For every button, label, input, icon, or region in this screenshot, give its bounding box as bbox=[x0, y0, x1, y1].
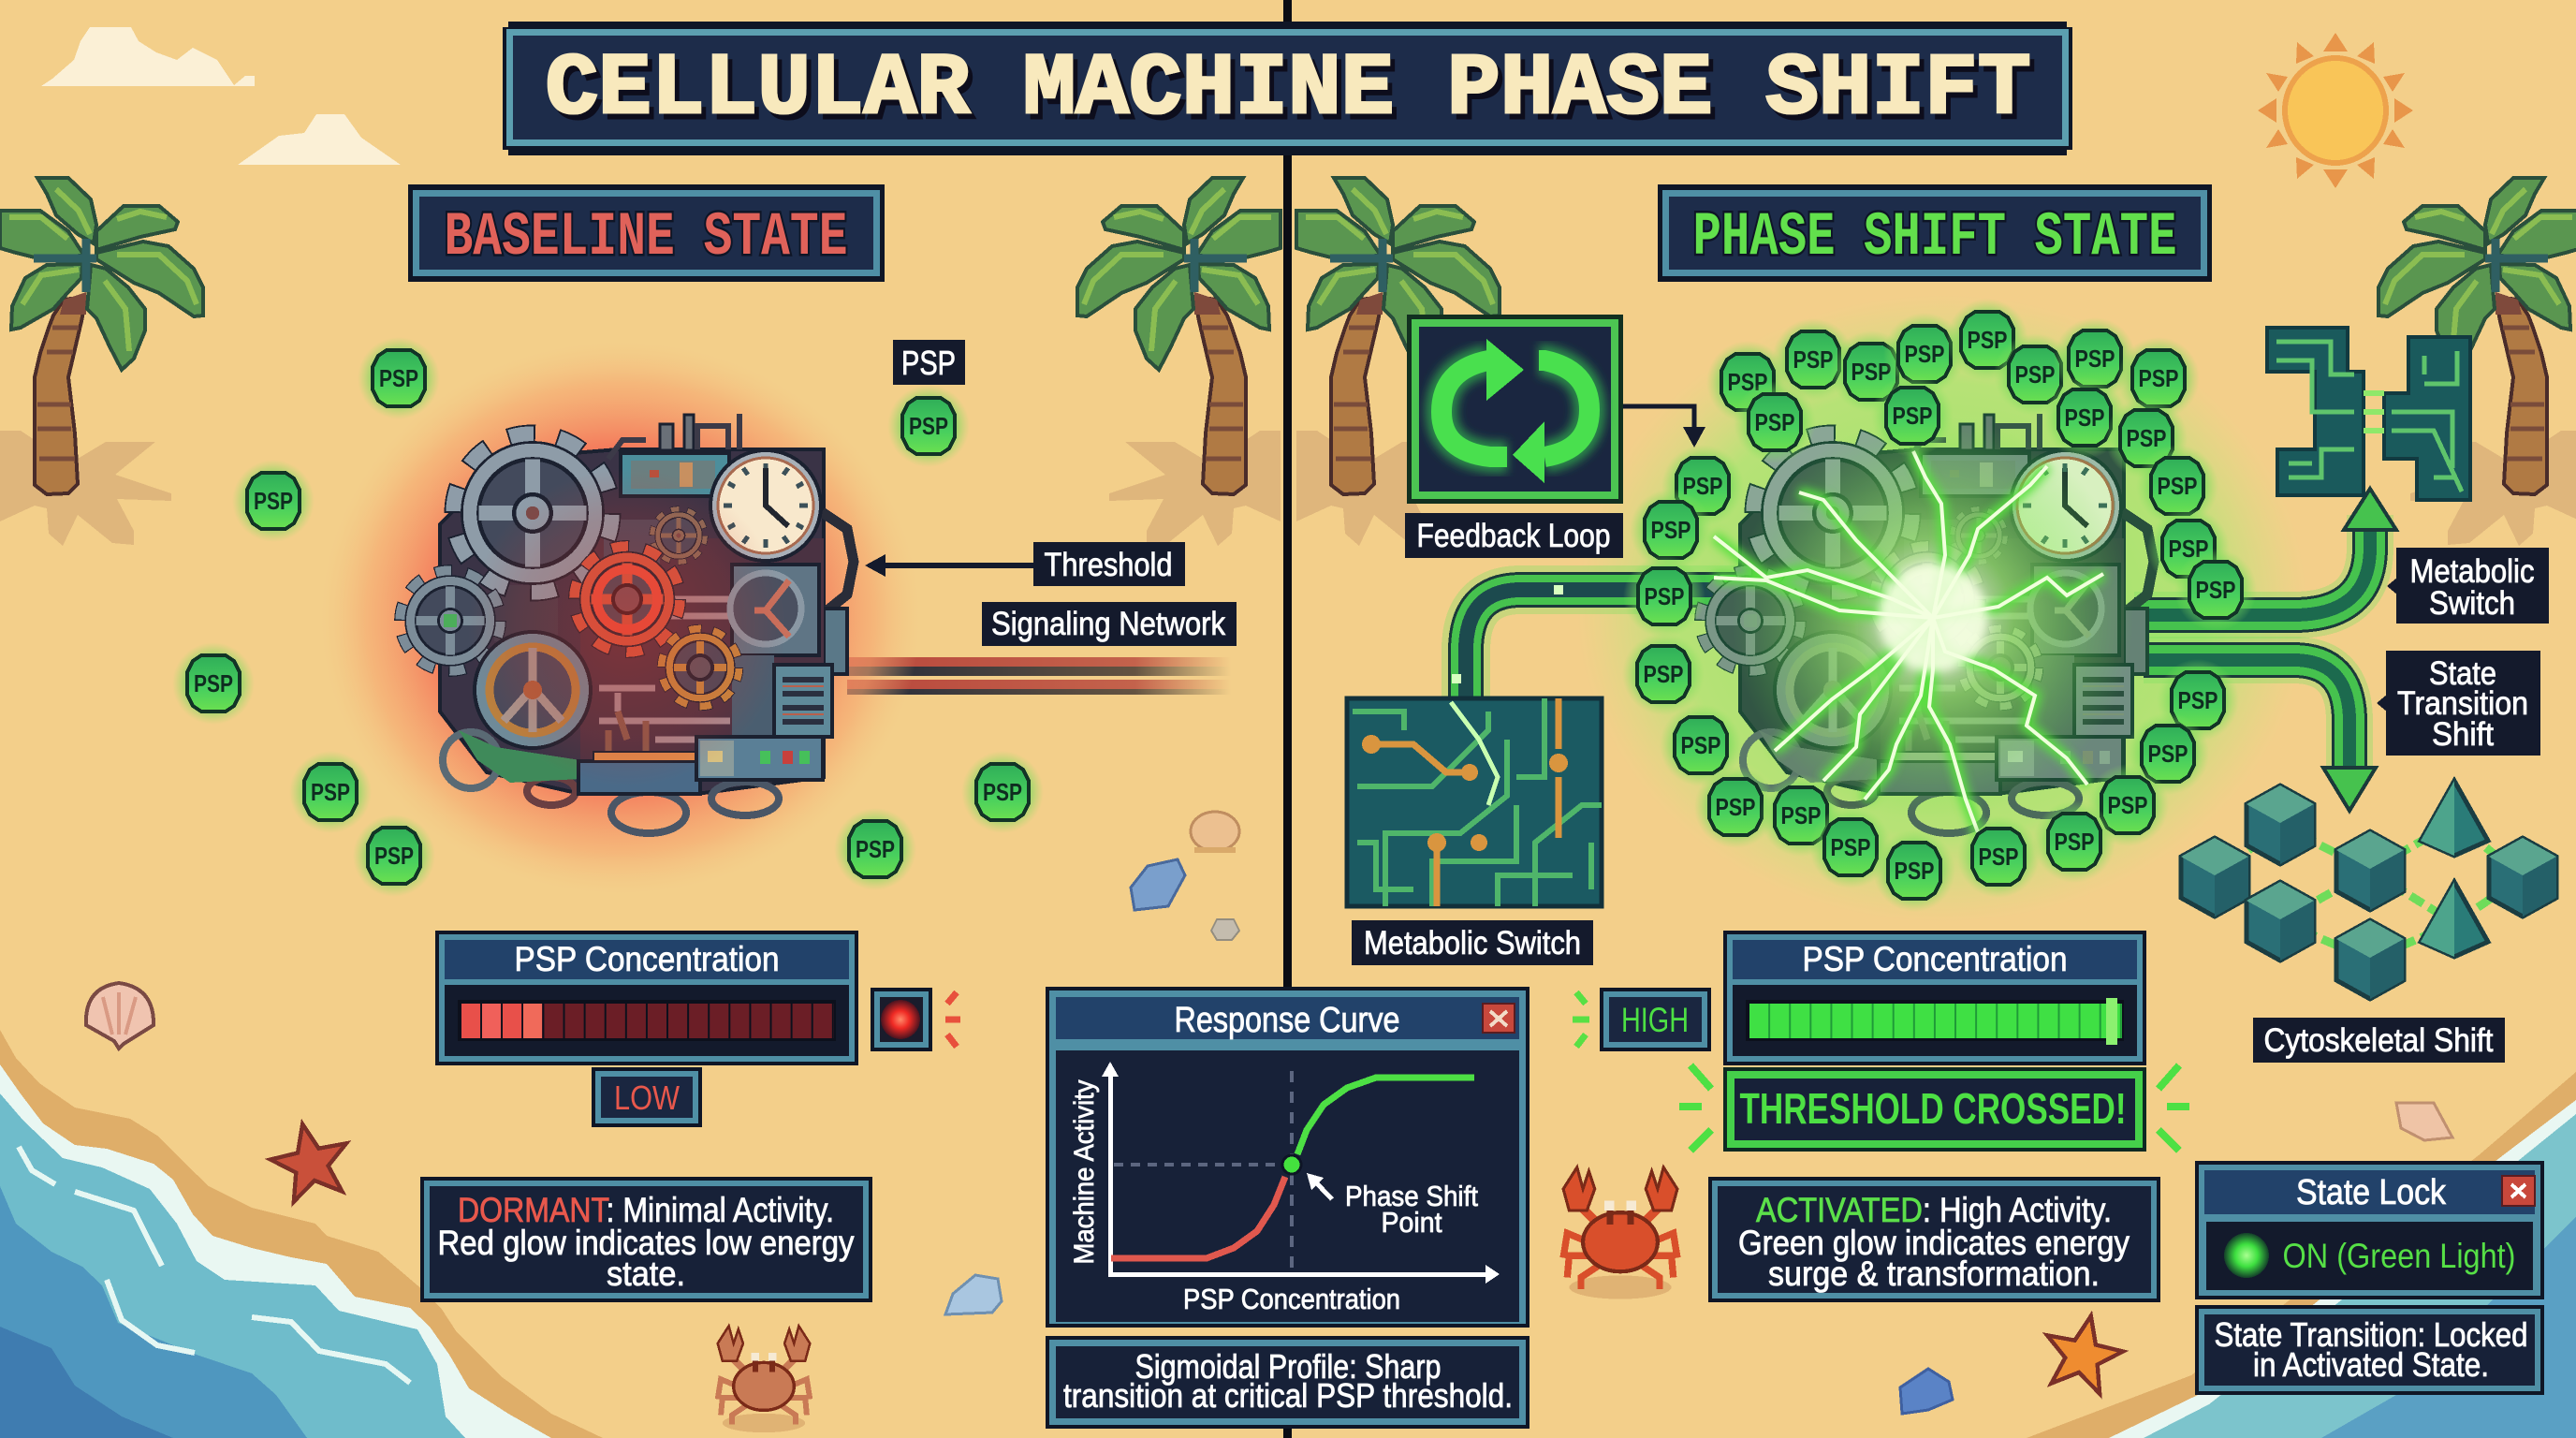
lightning burst bbox=[1714, 417, 2134, 832]
label: state transition shift: Transition bbox=[2397, 685, 2528, 722]
tag: HIGH bbox=[1573, 988, 1711, 1051]
PSP token bbox=[358, 337, 440, 419]
PSP token: PSP bbox=[2108, 791, 2147, 819]
text panel: sigmoidal profile: Sigmoidal Profile: Sharp bbox=[1134, 1347, 1442, 1386]
panel: baseline PSP concentration bbox=[435, 931, 858, 1065]
PSP token bbox=[1622, 633, 1705, 715]
text panel: sigmoidal profile bbox=[1046, 1336, 1530, 1429]
PSP token: PSP bbox=[2014, 360, 2056, 389]
title text: CELLULAR MACHINE PHASE SHIFT bbox=[545, 40, 2031, 139]
text panel: state transition bbox=[2195, 1305, 2544, 1395]
PSP token: PSP bbox=[2177, 686, 2218, 714]
cloud: large bbox=[41, 27, 255, 86]
PSP token bbox=[2157, 659, 2239, 741]
red dormant curve bbox=[1111, 1177, 1285, 1258]
PSP token: PSP bbox=[2138, 364, 2179, 392]
PSP token bbox=[1994, 333, 2076, 416]
PSP token: PSP bbox=[374, 842, 414, 870]
phase shift PSP tokens surrounding the machine bbox=[1622, 299, 2257, 912]
label: cytoskeletal shift: Cytoskeletal Shift bbox=[2263, 1022, 2494, 1059]
panel: phase shift PSP concentration bbox=[1723, 931, 2146, 1065]
heading: baseline state bbox=[408, 184, 885, 282]
PSP token: PSP bbox=[2127, 424, 2166, 452]
tag: LOW: LOW bbox=[614, 1078, 680, 1117]
close button bbox=[2502, 1176, 2535, 1206]
label: metabolic switch (two lines): Metabolic bbox=[2409, 553, 2535, 590]
PSP token: PSP bbox=[1780, 801, 1822, 829]
beach water: bottom right bbox=[2027, 1072, 2576, 1438]
PSP token bbox=[353, 814, 435, 897]
text panel: state transition: State Transition: Locked bbox=[2215, 1315, 2527, 1354]
center divider bbox=[1283, 0, 1292, 1438]
icon: blue rock large bbox=[1131, 859, 1185, 910]
cytoskeletal shift lattice bbox=[2181, 781, 2556, 999]
PSP token: PSP bbox=[1715, 793, 1756, 821]
PSP token: PSP bbox=[909, 412, 948, 440]
PSP token bbox=[1660, 704, 1742, 786]
callout: threshold crossed: THRESHOLD CROSSED! bbox=[1739, 1084, 2127, 1133]
PSP token: PSP bbox=[194, 669, 233, 697]
y axis bbox=[1102, 1062, 1119, 1276]
pipe: machine to metabolic switch circuit bbox=[1456, 590, 1741, 749]
PSP token bbox=[1809, 806, 1892, 888]
PSP token bbox=[2086, 764, 2169, 846]
PSP token bbox=[1661, 445, 1744, 527]
PSP token: PSP bbox=[1904, 340, 1945, 368]
PSP token: PSP bbox=[1893, 402, 1932, 430]
PSP token: PSP bbox=[1644, 660, 1683, 688]
status text: ON (Green Light) bbox=[2282, 1237, 2516, 1275]
icon: orange starfish bbox=[2038, 1308, 2129, 1397]
PSP token bbox=[1760, 774, 1842, 857]
pipe: machine to top circuit with up arrow bbox=[2134, 489, 2396, 615]
x axis bbox=[1108, 1265, 1500, 1284]
label: PSP: PSP bbox=[901, 344, 956, 382]
label: metabolic switch (two lines) bbox=[2387, 548, 2549, 624]
icon: pale blue rock bbox=[945, 1275, 1002, 1314]
PSP token: PSP bbox=[1754, 408, 1795, 436]
PSP token bbox=[961, 751, 1044, 833]
palm tree 4 bbox=[2378, 178, 2576, 494]
text panel: dormant bbox=[420, 1177, 872, 1302]
label: metabolic switch circuit: Metabolic Switch bbox=[1364, 925, 1581, 961]
heading: phase shift state bbox=[1658, 184, 2212, 282]
text panel: state transition: in Activated State. bbox=[2253, 1345, 2489, 1384]
phase shift glow bbox=[1577, 295, 2307, 922]
PSP token bbox=[2105, 397, 2188, 479]
PSP token bbox=[1630, 489, 1712, 571]
PSP token bbox=[2054, 317, 2136, 400]
text panel: activated: ACTIVATED: High Activity. bbox=[1756, 1191, 2112, 1229]
pipe: machine to cytoskeleton with down arrow bbox=[2144, 660, 2376, 811]
PSP token bbox=[1623, 555, 1705, 638]
PSP token bbox=[2033, 800, 2115, 883]
panel heading: Response Curve bbox=[1174, 1001, 1400, 1040]
PSP token bbox=[1873, 829, 1955, 912]
PSP token: PSP bbox=[2054, 828, 2095, 856]
x axis label: PSP Concentration bbox=[1183, 1283, 1400, 1315]
PSP token bbox=[1871, 374, 1954, 457]
label: state transition shift: Shift bbox=[2432, 716, 2494, 753]
icon: feedback loop bbox=[1407, 315, 1623, 504]
PSP token: PSP bbox=[1683, 472, 1722, 500]
heading: baseline state: BASELINE STATE bbox=[444, 202, 848, 272]
close button bbox=[1483, 1004, 1515, 1033]
icon: pink shell bbox=[86, 983, 154, 1049]
PSP token: PSP bbox=[1979, 843, 2018, 871]
palm tree 2 bbox=[1077, 178, 1281, 494]
PSP token bbox=[1883, 313, 1966, 395]
green activated curve bbox=[1297, 1078, 1474, 1154]
PSP token: PSP bbox=[1968, 326, 2007, 354]
pointer arrow bbox=[1307, 1173, 1332, 1199]
tag: HIGH: HIGH bbox=[1621, 1001, 1689, 1039]
PSP token bbox=[2147, 507, 2230, 590]
icon: starfish red bbox=[265, 1116, 356, 1205]
icon: faded crab bbox=[718, 1326, 810, 1432]
PSP token bbox=[1734, 381, 1816, 463]
PSP token: PSP bbox=[379, 364, 418, 392]
arrow: threshold pointer bbox=[865, 554, 1034, 577]
PSP token: PSP bbox=[254, 487, 293, 515]
PSP token: PSP bbox=[2157, 472, 2198, 500]
label: signaling network: Signaling Network bbox=[991, 606, 1225, 642]
PSP token bbox=[289, 751, 372, 833]
PSP token: PSP bbox=[2074, 345, 2115, 373]
text panel: activated: Green glow indicates energy bbox=[1738, 1224, 2130, 1262]
phase shift label: Point bbox=[1382, 1206, 1442, 1239]
PSP token: PSP bbox=[1644, 582, 1685, 610]
panel: state lock bbox=[2195, 1161, 2544, 1299]
PSP token: PSP bbox=[2147, 740, 2188, 768]
phase shift machine: activated bbox=[1702, 414, 2154, 833]
icon: pale shell right bbox=[2396, 1103, 2452, 1140]
high level bar bbox=[1746, 998, 2124, 1045]
text panel: dormant: Red glow indicates low energy bbox=[438, 1224, 855, 1262]
PSP token bbox=[2174, 549, 2257, 631]
PSP token bbox=[2127, 712, 2209, 795]
callout: threshold crossed bbox=[1679, 1065, 2189, 1152]
panel heading: PSP Concentration bbox=[1803, 940, 2067, 978]
PSP token: PSP bbox=[856, 835, 895, 863]
icon: small grey rock bbox=[1211, 919, 1239, 940]
PSP token: PSP bbox=[1831, 833, 1870, 861]
text panel: dormant: DORMANT: Minimal Activity. bbox=[458, 1191, 834, 1229]
palm tree 1 bbox=[0, 178, 203, 494]
PSP token bbox=[1772, 318, 1854, 401]
PSP token: PSP bbox=[1681, 731, 1720, 759]
metabolic switch circuit board bbox=[1347, 698, 1602, 906]
PSP token bbox=[2117, 337, 2200, 419]
PSP token: PSP bbox=[983, 778, 1022, 806]
PSP token bbox=[1694, 766, 1777, 848]
PSP token: PSP bbox=[1793, 345, 1833, 374]
threshold guides bbox=[1114, 1071, 1292, 1271]
baseline PSP tokens bbox=[172, 337, 1044, 897]
text panel: activated bbox=[1708, 1177, 2160, 1302]
PSP token bbox=[1946, 299, 2028, 381]
icon: tan shell bbox=[1191, 812, 1239, 853]
label: feedback loop: Feedback Loop bbox=[1417, 518, 1610, 554]
PSP token bbox=[1706, 341, 1789, 423]
PSP token: PSP bbox=[2168, 535, 2209, 563]
activated clock face bbox=[2017, 458, 2113, 553]
title banner bbox=[503, 22, 2072, 155]
text panel: dormant: state. bbox=[607, 1255, 685, 1293]
label: metabolic switch (two lines): Switch bbox=[2429, 585, 2515, 622]
palm tree 3 bbox=[1296, 178, 1500, 494]
PSP token bbox=[1830, 330, 1912, 413]
tag: LOW bbox=[592, 1067, 702, 1127]
text panel: sigmoidal profile: transition at critical PSP threshold. bbox=[1063, 1376, 1513, 1415]
PSP token bbox=[834, 808, 916, 890]
PSP token bbox=[232, 460, 315, 542]
icon: red crab bbox=[1563, 1167, 1677, 1299]
phase shift point bbox=[1282, 1155, 1301, 1174]
heading: phase shift state: PHASE SHIFT STATE bbox=[1692, 202, 2177, 272]
phase shift label bbox=[1345, 1180, 1478, 1239]
arrow: feedback to machine bbox=[1623, 406, 1705, 448]
indicator: red light bbox=[871, 988, 960, 1051]
PSP token: PSP bbox=[1895, 857, 1934, 885]
text panel: activated: surge & transformation. bbox=[1768, 1255, 2100, 1293]
PSP token bbox=[1957, 815, 2040, 898]
green status light bbox=[2224, 1233, 2269, 1278]
low level bar bbox=[458, 1000, 836, 1041]
signaling network lines bbox=[847, 657, 1231, 695]
PSP token: PSP bbox=[1728, 368, 1767, 396]
top right circuit shapes bbox=[2267, 328, 2470, 500]
PSP token: PSP bbox=[1852, 358, 1891, 386]
beach water: bottom left bbox=[0, 1030, 603, 1438]
cloud: small bbox=[238, 114, 401, 165]
PSP token: PSP bbox=[2196, 576, 2235, 604]
PSP token: PSP bbox=[1651, 516, 1690, 544]
palm shadows bbox=[0, 431, 2576, 546]
baseline machine glow bbox=[321, 342, 920, 894]
PSP token: PSP bbox=[311, 778, 350, 806]
label: state transition shift: State bbox=[2429, 655, 2496, 692]
PSP token bbox=[172, 642, 255, 725]
PSP token: PSP bbox=[2065, 404, 2104, 432]
baseline machine: dormant gears and clock bbox=[402, 414, 854, 833]
panel heading: State Lock bbox=[2296, 1173, 2447, 1212]
panel: response curve bbox=[1046, 987, 1530, 1328]
PSP token bbox=[2136, 445, 2218, 527]
PSP token bbox=[887, 385, 970, 467]
label: threshold: Threshold bbox=[1045, 547, 1172, 583]
panel heading: PSP Concentration bbox=[515, 940, 779, 978]
phase shift label: Phase Shift bbox=[1345, 1180, 1478, 1212]
label: state transition shift bbox=[2377, 651, 2540, 756]
y axis label: Machine Activity bbox=[1069, 1080, 1100, 1264]
PSP token bbox=[2043, 376, 2126, 459]
icon: blue rock small bbox=[1900, 1369, 1953, 1414]
icon: sun bbox=[2258, 33, 2413, 188]
